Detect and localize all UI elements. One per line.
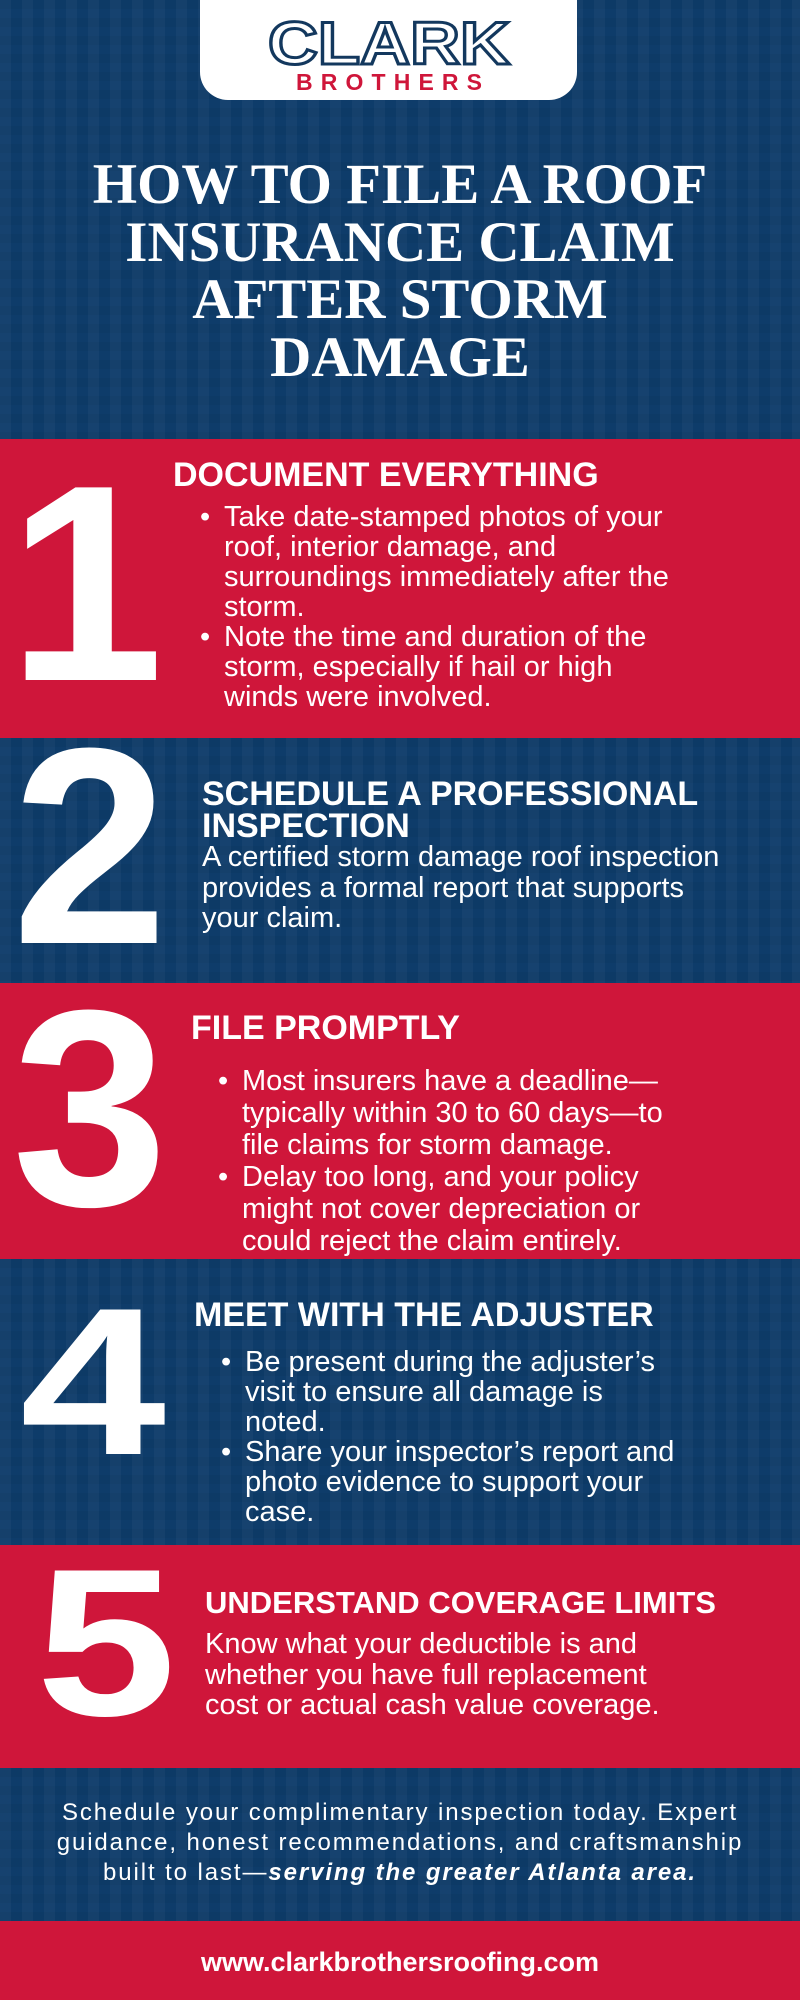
heading 4: MEET WITH THE ADJUSTER [194, 1296, 654, 1334]
text 1: storm, especially if hail or high [224, 651, 612, 683]
number 1: 1 [8, 428, 164, 740]
footer text: Schedule your complimentary inspection today. Expert [62, 1799, 738, 1826]
panel: step 3 [0, 983, 800, 1259]
background: header [0, 0, 800, 439]
text 2: your claim. [202, 902, 342, 934]
text 1: roof, interior damage, and [224, 531, 556, 563]
heading 2: SCHEDULE A PROFESSIONAL [202, 775, 698, 813]
heading 2 [202, 775, 698, 845]
text 4: Be present during the adjuster’s [245, 1346, 655, 1378]
text 4 [222, 1346, 674, 1528]
panel: url bar [0, 1921, 800, 2000]
title: AFTER STORM [192, 268, 608, 331]
logo: BROTHERS [296, 69, 482, 95]
text 4: noted. [245, 1406, 326, 1438]
text 3: Delay too long, and your policy [242, 1161, 639, 1193]
logo [200, 0, 577, 100]
text 4: Share your inspector’s report and [245, 1436, 674, 1468]
number 2: 2 [12, 691, 168, 1003]
panel: step 5 [0, 1545, 800, 1768]
text 3: could reject the claim entirely. [242, 1225, 622, 1257]
logo: CLARK [268, 10, 510, 77]
title [93, 153, 707, 389]
heading 5: UNDERSTAND COVERAGE LIMITS [205, 1585, 716, 1620]
panel: step 2 [0, 738, 800, 983]
text 4: case. [245, 1496, 314, 1528]
url: www.clarkbrothersroofing.com [201, 1947, 599, 1977]
text 3: typically within 30 to 60 days—to [242, 1097, 663, 1129]
text 1: Note the time and duration of the [224, 621, 646, 653]
heading 3: FILE PROMPTLY [191, 1009, 460, 1047]
heading 1: DOCUMENT EVERYTHING [173, 456, 599, 494]
title: INSURANCE CLAIM [125, 211, 675, 274]
panel: footer call to action [0, 1768, 800, 1921]
number 4: 4 [20, 1264, 166, 1499]
text 1: winds were involved. [224, 681, 492, 713]
heading 2: INSPECTION [202, 807, 410, 845]
text 1: Take date-stamped photos of your [224, 501, 662, 533]
text 1: surroundings immediately after the [224, 561, 669, 593]
text 4: visit to ensure all damage is [245, 1376, 603, 1408]
text 2: A certified storm damage roof inspection [202, 841, 719, 873]
number 3: 3 [12, 953, 168, 1265]
footer text [57, 1799, 743, 1886]
footer text: built to last—serving the greater Atlanta area. [103, 1859, 697, 1886]
text 5 [205, 1628, 660, 1721]
text 3: file claims for storm damage. [242, 1129, 613, 1161]
text 3: Most insurers have a deadline— [242, 1065, 658, 1097]
text 3: might not cover depreciation or [242, 1193, 640, 1225]
panel: step 4 [0, 1259, 800, 1545]
title: DAMAGE [270, 326, 530, 389]
text 2 [202, 841, 719, 934]
text 1 [201, 501, 669, 713]
text 5: Know what your deductible is and [205, 1628, 637, 1660]
text 3 [219, 1065, 663, 1257]
text 4: photo evidence to support your [245, 1466, 643, 1498]
text 1: storm. [224, 591, 305, 623]
text 5: cost or actual cash value coverage. [205, 1689, 660, 1721]
footer text: guidance, honest recommendations, and craftsmanship [57, 1829, 743, 1856]
number 5: 5 [36, 1525, 176, 1760]
text 2: provides a formal report that supports [202, 872, 684, 904]
text 5: whether you have full replacement [205, 1658, 647, 1690]
title: HOW TO FILE A ROOF [93, 153, 707, 216]
panel: step 1 [0, 439, 800, 738]
